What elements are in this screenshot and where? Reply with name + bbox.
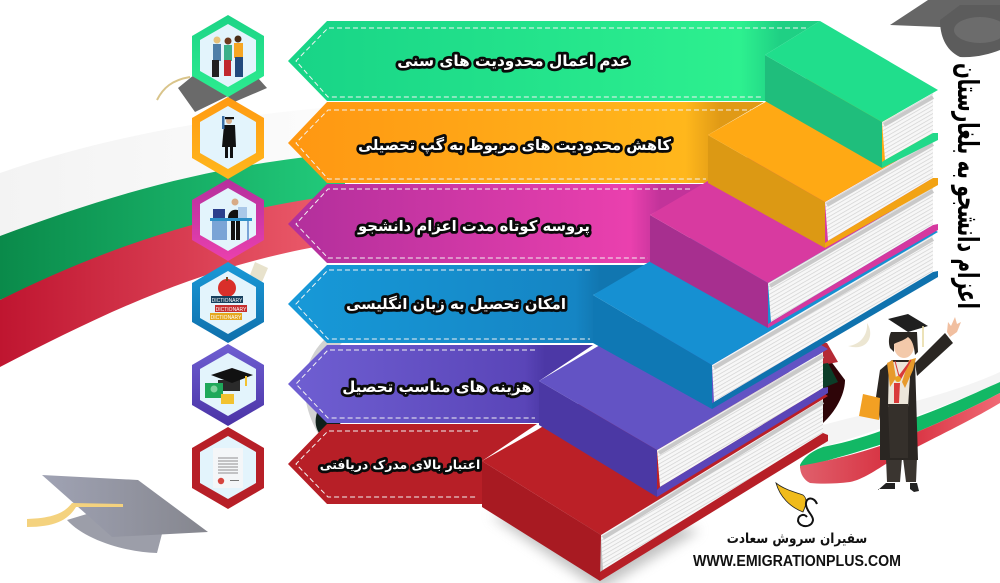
banner text 2: کاهش محدودیت های مربوط به گپ تحصیلی — [358, 136, 671, 154]
banner text 4: امکان تحصیل به زبان انگلیسی — [346, 295, 566, 313]
company logo — [693, 483, 901, 570]
soft shadow under book stack — [490, 515, 700, 583]
banner 4: blue — [288, 265, 650, 343]
book 5: purple — [539, 280, 828, 497]
hexagon 4: dictionaries icon — [192, 262, 264, 343]
website address: WWW.EMIGRATIONPLUS.COM — [693, 553, 901, 570]
banner 6: red — [288, 424, 537, 504]
hexagon 2: graduate icon — [192, 97, 264, 179]
logo wing — [776, 483, 806, 512]
book 6: red — [482, 322, 828, 581]
banner 3: magenta — [288, 184, 707, 263]
title: vertical heading: اعزام دانشجو به بلغارستان — [951, 63, 985, 309]
logo persian name: سفیران سروش سعادت — [727, 531, 867, 547]
banner text 6: اعتبار بالای مدرک دریافتی — [320, 457, 480, 472]
graduation cap: behind first hexagons — [157, 70, 267, 112]
book 4: blue — [593, 162, 938, 409]
banner 2: orange — [288, 102, 764, 183]
banner 1: green — [288, 21, 820, 101]
graduate character — [859, 314, 961, 492]
book 2: orange — [708, 70, 938, 248]
banner text 5: هزینه های مناسب تحصیل — [342, 378, 532, 396]
book 1: green — [765, 21, 938, 168]
graduation cap: bottom left — [27, 475, 208, 553]
hexagon 4: dictionaries icon: DICTIONARY — [216, 307, 247, 313]
banner text 3: پروسه کوتاه مدت اعزام دانشجو — [357, 218, 590, 235]
hexagon 4: dictionaries icon: DICTIONARY — [212, 298, 243, 304]
hexagon 5: cap and money icon — [192, 344, 264, 426]
Bulgarian flag ribbon: left sweep — [0, 106, 345, 367]
ribbon curl behind the banners — [250, 262, 350, 442]
hexagon 6: certificate icon — [192, 427, 264, 509]
hexagon 3: office desk icon — [192, 179, 264, 261]
book 3: magenta — [650, 115, 938, 328]
graduation cap: top right — [890, 0, 1000, 57]
banner 5: purple — [288, 345, 593, 423]
Bulgarian flag ribbon: right sweep and curl — [800, 323, 1000, 484]
banner text 1: عدم اعمال محدودیت های سنی — [397, 52, 630, 70]
hexagon 1: students icon — [192, 15, 264, 97]
hexagon 4: dictionaries icon: DICTIONARY — [211, 315, 242, 321]
